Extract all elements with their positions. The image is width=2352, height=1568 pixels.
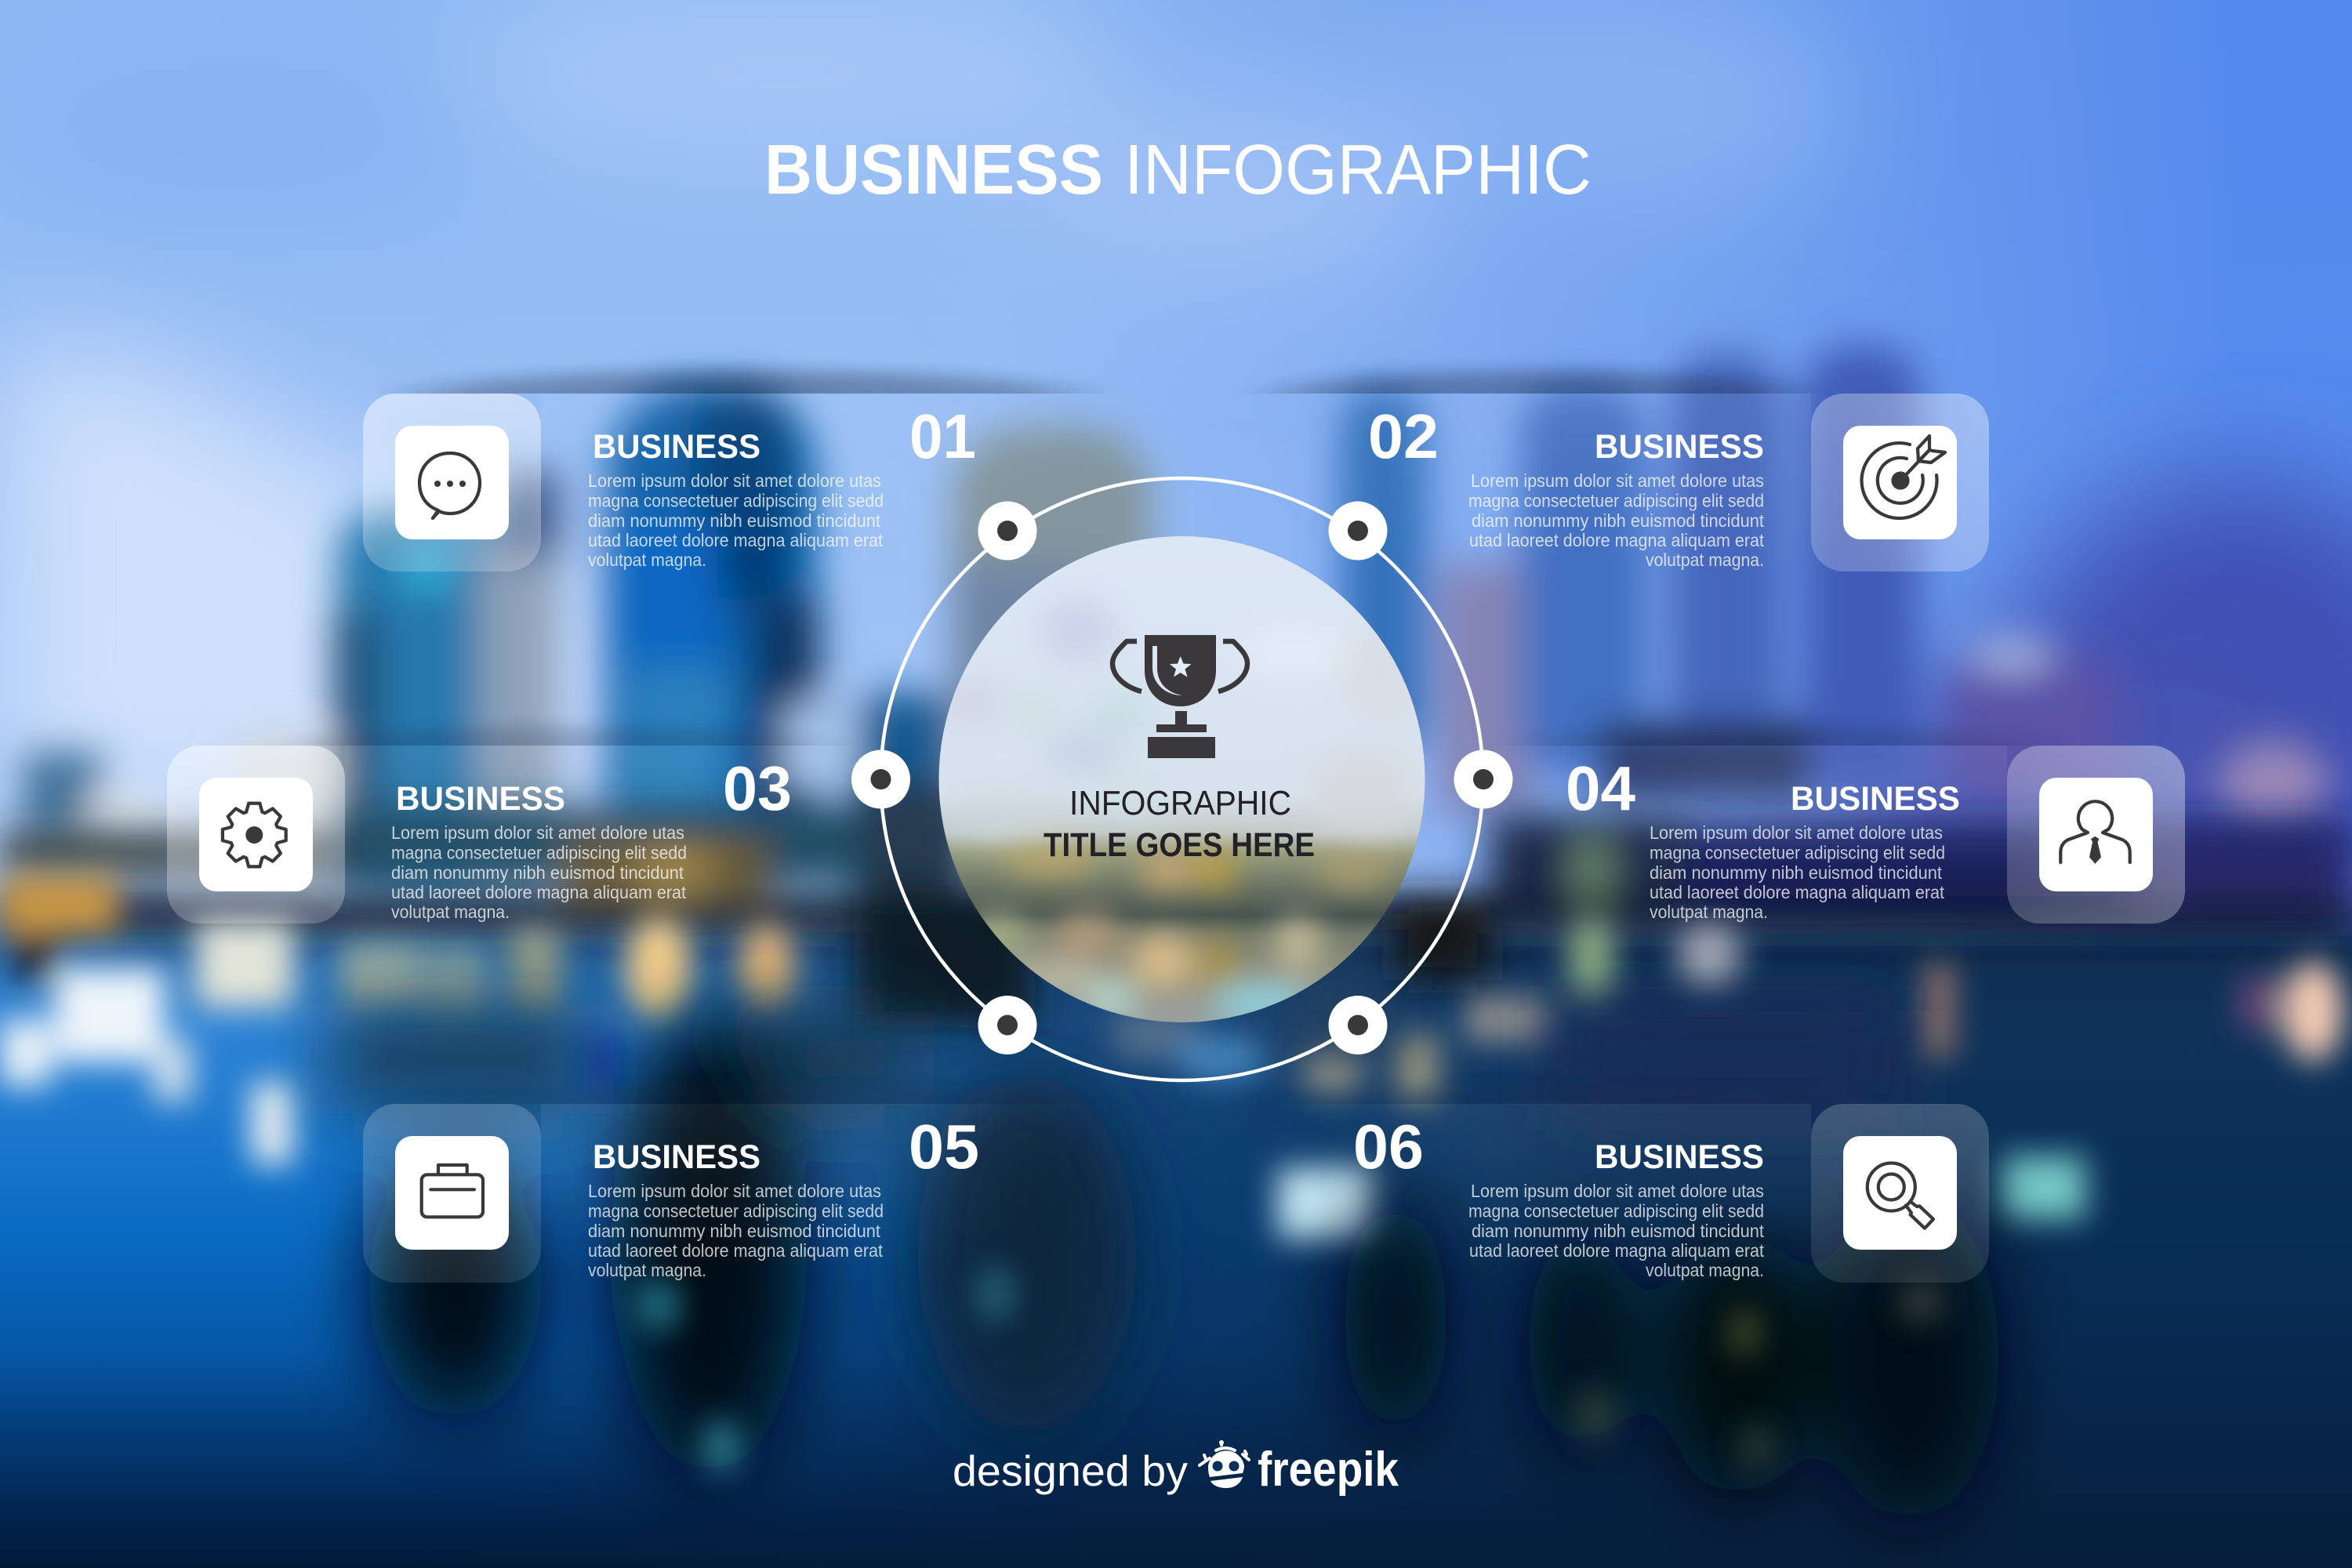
text block 06: Lorem ipsum dolor sit amet dolore utas [1471,1181,1764,1201]
text block 05: Lorem ipsum dolor sit amet dolore utas [588,1181,881,1201]
text block 03: diam nonummy nibh euismod tincidunt [391,862,684,883]
text block 02: magna consectetuer adipiscing elit sedd [1468,491,1764,511]
panel 05 [363,1104,1098,1283]
panel 06 [1286,1104,1989,1283]
panel 01 [363,394,1098,572]
text block 04: diam nonummy nibh euismod tincidunt [1650,862,1943,883]
text block 02: utad laoreet dolore magna aliquam erat [1469,530,1765,550]
heading 05: BUSINESS [593,1138,760,1176]
text block 01: magna consectetuer adipiscing elit sedd [588,491,884,511]
icon: trophy [1112,635,1247,758]
node 03 [851,750,910,809]
heading 01: BUSINESS [593,428,760,466]
icon: speech bubble [395,426,509,539]
number 05: 05 [909,1112,979,1181]
text block 03 [391,822,687,922]
node 06 [1328,996,1388,1054]
text block 06: utad laoreet dolore magna aliquam erat [1469,1240,1765,1261]
number 01: 01 [909,401,976,471]
text block 04: Lorem ipsum dolor sit amet dolore utas [1650,822,1943,843]
text block 04: volutpat magna. [1650,902,1768,922]
glass tile 02 [1811,394,1989,572]
text block 01: Lorem ipsum dolor sit amet dolore utas [588,470,881,491]
footer credit: freepik [1258,1443,1399,1497]
centre text [1044,784,1315,864]
glass tile 03 [167,746,345,924]
panel lens shadows [267,365,2078,1134]
heading 06: BUSINESS [1595,1138,1764,1176]
text block 05 [588,1181,884,1280]
icon: target with arrow [1843,426,1957,539]
text block 02: volutpat magna. [1646,550,1764,570]
horizon band and city lights [0,784,2352,1027]
footer credit: designed by [953,1446,1188,1495]
text block 06 [1468,1181,1765,1280]
icon: gear [199,778,313,891]
icon: businessperson [2039,778,2153,891]
panel 04 [1537,746,2185,924]
glass tile 04 [2007,746,2185,924]
panel 02 [1286,394,1989,572]
text block 04 [1650,822,1945,922]
text block 03: volutpat magna. [391,902,510,922]
text block 06: volutpat magna. [1646,1260,1764,1280]
text block 04: utad laoreet dolore magna aliquam erat [1650,882,1945,902]
text block 04: magna consectetuer adipiscing elit sedd [1650,842,1945,862]
icon: magnifying glass [1843,1136,1957,1250]
text block 05: diam nonummy nibh euismod tincidunt [588,1221,881,1241]
node 02 [1328,502,1388,560]
text block 03: magna consectetuer adipiscing elit sedd [391,842,687,862]
text block 01: diam nonummy nibh euismod tincidunt [588,510,881,531]
node 05 [978,996,1036,1054]
text block 01: utad laoreet dolore magna aliquam erat [588,530,884,550]
frosted centre disc [938,536,1425,1022]
text block 01 [588,470,884,570]
centre text: INFOGRAPHIC [1069,784,1291,822]
title [764,131,1592,209]
text block 02: Lorem ipsum dolor sit amet dolore utas [1471,470,1764,491]
water reflections of towers [329,988,1999,1521]
text block 02: diam nonummy nibh euismod tincidunt [1472,510,1765,531]
node 04 [1454,750,1513,809]
centre text: TITLE GOES HERE [1044,826,1315,864]
number 03: 03 [723,753,792,823]
glass tile 01 [363,394,541,572]
text block 06: diam nonummy nibh euismod tincidunt [1472,1221,1765,1241]
text block 01: volutpat magna. [588,550,706,570]
glass tile 06 [1811,1104,1989,1283]
number 04: 04 [1566,753,1636,823]
number 02: 02 [1368,401,1439,471]
node 01 [978,502,1036,560]
central ring diagram [851,478,1513,1080]
outer ring [881,478,1483,1080]
icon: freepik mascot [1200,1440,1249,1488]
text block 02 [1468,470,1765,570]
panel 03 [167,746,847,924]
icon: briefcase [395,1136,509,1250]
heading 02: BUSINESS [1595,428,1764,466]
heading 04: BUSINESS [1791,780,1960,818]
water surface [0,886,2352,1568]
text block 05: volutpat magna. [588,1260,706,1280]
glass tile 05 [363,1104,541,1283]
text block 05: utad laoreet dolore magna aliquam erat [588,1240,884,1261]
text block 03: Lorem ipsum dolor sit amet dolore utas [391,822,684,843]
text block 06: magna consectetuer adipiscing elit sedd [1468,1201,1764,1221]
footer credit [953,1440,1399,1497]
number 06: 06 [1353,1112,1424,1181]
text block 03: utad laoreet dolore magna aliquam erat [391,882,687,902]
title: BUSINESS [764,131,1103,209]
heading 03: BUSINESS [396,780,565,818]
skyline towers [24,345,2328,886]
title: INFOGRAPHIC [1124,131,1592,209]
text block 05: magna consectetuer adipiscing elit sedd [588,1201,884,1221]
